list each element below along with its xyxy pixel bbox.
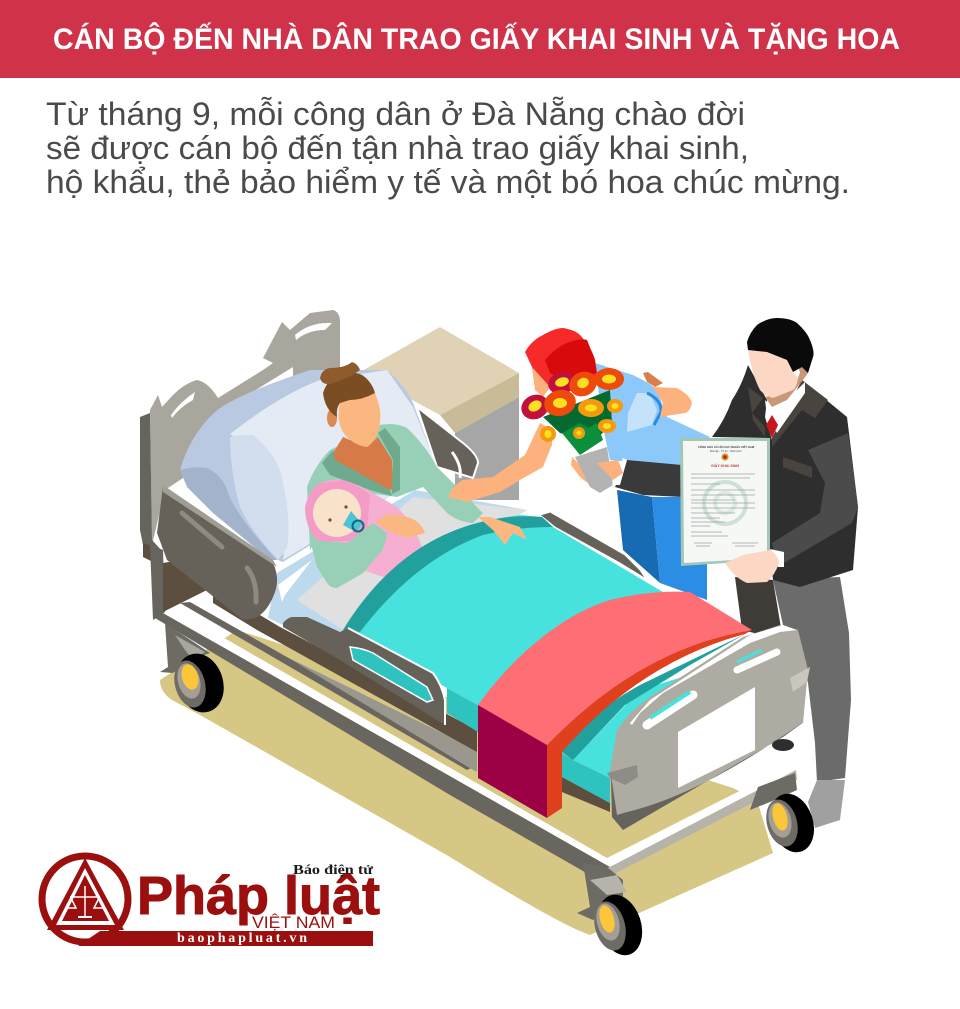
logo wordmark: Pháp luật <box>137 866 380 926</box>
baby <box>305 479 423 577</box>
far-side rail <box>540 512 646 579</box>
lower bed frame rails <box>155 602 797 875</box>
intro text: sẽ được cán bộ đến tận nhà trao giấy khai sinh, <box>46 130 749 166</box>
far-side upper rail <box>417 407 478 478</box>
logo: Pháp luật Việt Nam <box>42 856 380 946</box>
birth certificate: Độc lập - Tự do - Hạnh phúc <box>710 450 743 453</box>
logo subname: VIỆT NAM <box>252 913 335 932</box>
flower pot <box>575 447 613 493</box>
mother arm with baby <box>310 523 387 588</box>
man trousers <box>735 577 851 782</box>
mother hand on blanket <box>478 517 527 545</box>
title banner <box>0 0 960 78</box>
mother hand on baby <box>375 515 425 538</box>
floor shadow <box>160 630 773 935</box>
intro text: Từ tháng 9, mỗi công dân ở Đà Nẵng chào đời <box>46 96 745 132</box>
woman raised arm <box>643 372 663 387</box>
mother chest <box>333 437 393 490</box>
right wheel <box>750 739 821 858</box>
teal blanket <box>343 515 700 732</box>
mother robe <box>307 424 483 550</box>
shirt and tie <box>765 382 805 433</box>
sheet and mattress <box>268 490 527 632</box>
logo tagline: Báo điện tử <box>293 863 374 878</box>
woman lower hand <box>571 457 590 485</box>
logo emblem <box>42 856 128 942</box>
bouquet <box>517 367 624 455</box>
head-side rail <box>157 485 277 620</box>
illustration: hospital bed scene <box>140 310 858 961</box>
birth certificate <box>680 438 770 566</box>
salmon blanket <box>478 592 752 818</box>
footboard <box>607 625 810 830</box>
logo address text: baophapluat.vn <box>177 931 307 946</box>
nightstand <box>360 327 519 500</box>
footboard white label <box>678 687 755 788</box>
man hand under certificate <box>725 549 784 583</box>
man head <box>747 318 814 407</box>
woman hair and face <box>525 328 597 397</box>
man jacket <box>712 365 858 587</box>
foot-end mattress <box>562 634 770 812</box>
birth certificate: GIẤY KHAI SINH <box>711 464 739 468</box>
near-side rail <box>283 617 445 725</box>
man shoe <box>808 780 845 828</box>
visitor woman with flowers <box>448 328 710 600</box>
official man with certificate <box>597 318 858 828</box>
man arm to pot <box>615 460 682 497</box>
jacket lapels <box>748 380 828 478</box>
title banner: CÁN BỘ ĐẾN NHÀ DÂN TRAO GIẤY KHAI SINH VÀ TẶNG HOA <box>53 22 900 56</box>
man hand on pot <box>597 460 623 480</box>
logo address bar <box>78 931 373 946</box>
intro text: hộ khẩu, thẻ bảo hiểm y tế và một bó hoa chúc mừng. <box>46 164 850 200</box>
mother head <box>320 362 380 447</box>
headboard <box>140 310 477 752</box>
left wheel <box>160 623 231 719</box>
woman arm over bed <box>448 423 552 502</box>
birth certificate: CỘNG HÒA XÃ HỘI CHỦ NGHĨA VIỆT NAM <box>698 444 755 449</box>
front wheel <box>577 863 650 961</box>
woman shirt <box>595 363 710 465</box>
mother <box>305 362 483 588</box>
pillow <box>180 370 437 562</box>
robe collar <box>322 428 400 496</box>
intro text <box>46 96 850 200</box>
woman trousers <box>617 490 707 600</box>
